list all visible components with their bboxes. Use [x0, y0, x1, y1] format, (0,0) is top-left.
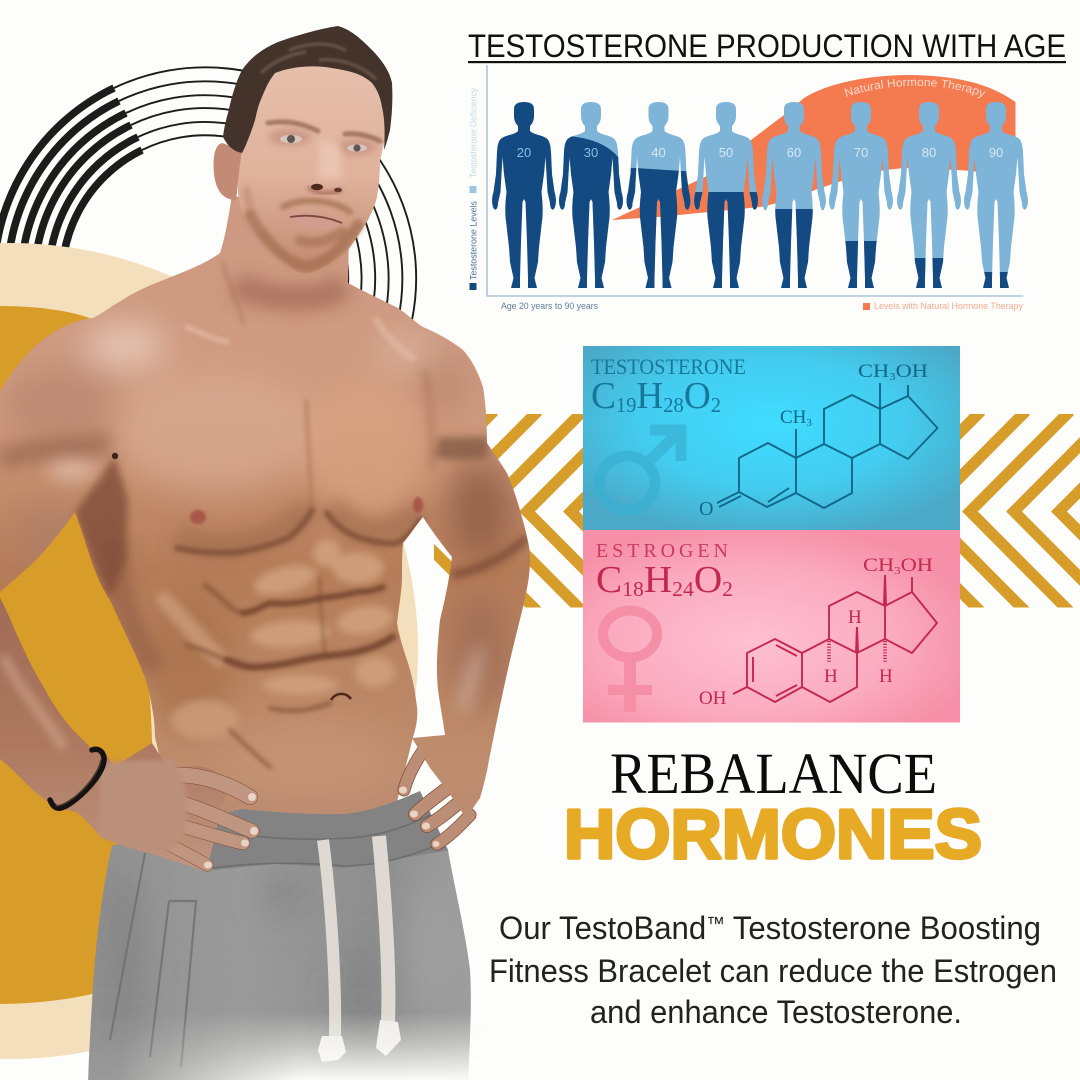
figure age 80: [897, 102, 961, 288]
eyebrows: [268, 122, 380, 141]
testosterone formula: 19: [616, 393, 636, 417]
figure age 60: 60: [787, 145, 801, 160]
molecule labels: H: [848, 607, 862, 628]
cloth shading: [112, 882, 367, 1020]
figure age 50: [694, 102, 758, 288]
panel: testosterone: [583, 346, 960, 530]
estrogen formula: 24: [672, 577, 694, 601]
pants bottom fade: [88, 1018, 470, 1080]
female symbol: [603, 610, 657, 712]
armpit and biceps shadows: [75, 370, 527, 600]
waistband ribbing: [213, 815, 441, 868]
testosterone molecule: [717, 383, 938, 508]
description text: [489, 910, 1057, 1030]
ab creases: [187, 578, 393, 767]
ab highlights: [155, 539, 395, 740]
figure age 50: 50: [719, 145, 733, 160]
abdominal muscles: [155, 539, 395, 767]
chart: testosterone levels by age: Natural Hormone Therapy: [844, 79, 986, 98]
torso and arms: [0, 180, 550, 860]
nose: [308, 184, 342, 193]
left drawstring: [323, 840, 335, 1036]
navel: [331, 694, 351, 700]
back of hand: [412, 735, 490, 818]
chest lines: [185, 262, 415, 510]
testosterone formula: H: [636, 375, 663, 417]
molecule labels: OH: [901, 555, 933, 576]
figure age 90: [964, 102, 1028, 288]
molecule labels: [699, 555, 933, 709]
description text: and enhance Testosterone.: [590, 994, 962, 1030]
gold background shape: [0, 306, 152, 1004]
pectoral creases: [177, 510, 420, 553]
molecule labels: CH: [780, 407, 806, 428]
eyes: [280, 135, 367, 152]
finger shadows: [404, 748, 470, 844]
estrogen formula: H: [644, 559, 672, 601]
molecule wedges: [855, 575, 887, 653]
drawstring knots: [318, 1020, 401, 1062]
forearm highlight: [5, 660, 62, 745]
fleece texture: [80, 780, 480, 1080]
testosterone formula: 2: [711, 393, 721, 417]
eye sockets: [268, 129, 377, 155]
testosterone heading: TESTOSTERONE: [591, 354, 746, 379]
bracelet: [50, 749, 104, 808]
hair highlights: [262, 44, 375, 78]
molecule labels: OH: [896, 361, 928, 382]
beard and cheek shading: [247, 190, 358, 266]
fingers: [150, 775, 252, 865]
description text: Our TestoBand: [499, 910, 712, 946]
mouth: [290, 212, 342, 229]
molecule labels: 3: [894, 565, 901, 577]
heading: hormones: HORMONES: [564, 795, 982, 873]
testosterone formula: O: [684, 375, 711, 417]
fingers: [404, 748, 470, 844]
decorative concentric arcs: [0, 67, 416, 320]
nipples: [190, 497, 423, 524]
description text: Fitness Bracelet can reduce the Estrogen: [489, 953, 1057, 989]
estrogen formula: 2: [722, 577, 733, 601]
molecule labels: 3: [889, 371, 896, 383]
face and head: [213, 26, 392, 273]
muscle highlights: [48, 460, 486, 716]
pocket and seams: [110, 853, 196, 1067]
molecule labels: 3: [806, 417, 812, 429]
figure age 30: [559, 102, 623, 288]
male symbol: [599, 430, 681, 510]
estrogen formula: O: [694, 559, 722, 601]
nails: [399, 786, 440, 847]
right drawstring: [379, 836, 388, 1022]
estrogen heading: ESTROGEN: [596, 540, 728, 562]
estrogen formula: 18: [622, 577, 644, 601]
description text: Testosterone Boosting: [725, 910, 1041, 946]
man figure: [0, 26, 550, 1080]
estrogen formula: C: [596, 559, 621, 601]
figure age 70: [829, 102, 893, 288]
molecule labels: O: [699, 498, 713, 520]
molecule labels: H: [879, 666, 893, 687]
face shape: [238, 64, 385, 273]
beige background circle: [0, 243, 418, 1059]
figure age 30: 30: [584, 145, 598, 160]
left forearm and hand: [0, 598, 258, 871]
x axis label: Age 20 years to 90 years: [501, 301, 598, 311]
molecule labels: [699, 361, 928, 520]
figure age 20: [492, 102, 556, 288]
nose highlight: [318, 140, 342, 180]
description text: ™: [706, 914, 725, 935]
y axis legend: levels: Testosterone Levels: [468, 201, 480, 280]
gold chevron band: [394, 411, 1080, 612]
right hand: [399, 735, 490, 847]
broad tonal areas: [0, 323, 512, 800]
soft shadows: [0, 285, 422, 670]
molecule labels: CH: [858, 361, 884, 382]
figure age 40: [627, 102, 690, 288]
molecule labels: CH: [863, 555, 889, 576]
waistband: [200, 791, 450, 870]
pants: [80, 780, 480, 1080]
heading: rebalance: REBALANCE: [610, 741, 937, 806]
panel: estrogen: [583, 530, 960, 722]
figure age 90: 90: [989, 145, 1003, 160]
hair: [223, 26, 392, 153]
figure age 60: [762, 102, 826, 288]
back of hand: [100, 760, 187, 854]
curved therapy label: [846, 86, 985, 98]
figure age 20: 20: [517, 145, 531, 160]
y axis legend: deficiency: Testosterone Deficiency: [468, 88, 480, 178]
therapy legend: Levels with Natural Hormone Therapy: [874, 301, 1023, 311]
axes: [487, 65, 1023, 296]
therapy area: [612, 75, 1016, 220]
figure age 80: 80: [922, 145, 936, 160]
armpit spot: [112, 453, 118, 459]
figure age 70: 70: [854, 145, 868, 160]
finger shadows: [150, 775, 252, 865]
testosterone formula: C: [591, 375, 616, 417]
chart: testosterone levels by age: [468, 65, 1028, 311]
molecule labels: H: [824, 666, 838, 687]
testosterone formula: 28: [663, 393, 684, 417]
figure age 40: 40: [651, 145, 666, 160]
nails: [204, 793, 258, 868]
molecule labels: OH: [699, 688, 727, 709]
ear: [213, 143, 242, 200]
estrogen molecule: [733, 577, 937, 702]
